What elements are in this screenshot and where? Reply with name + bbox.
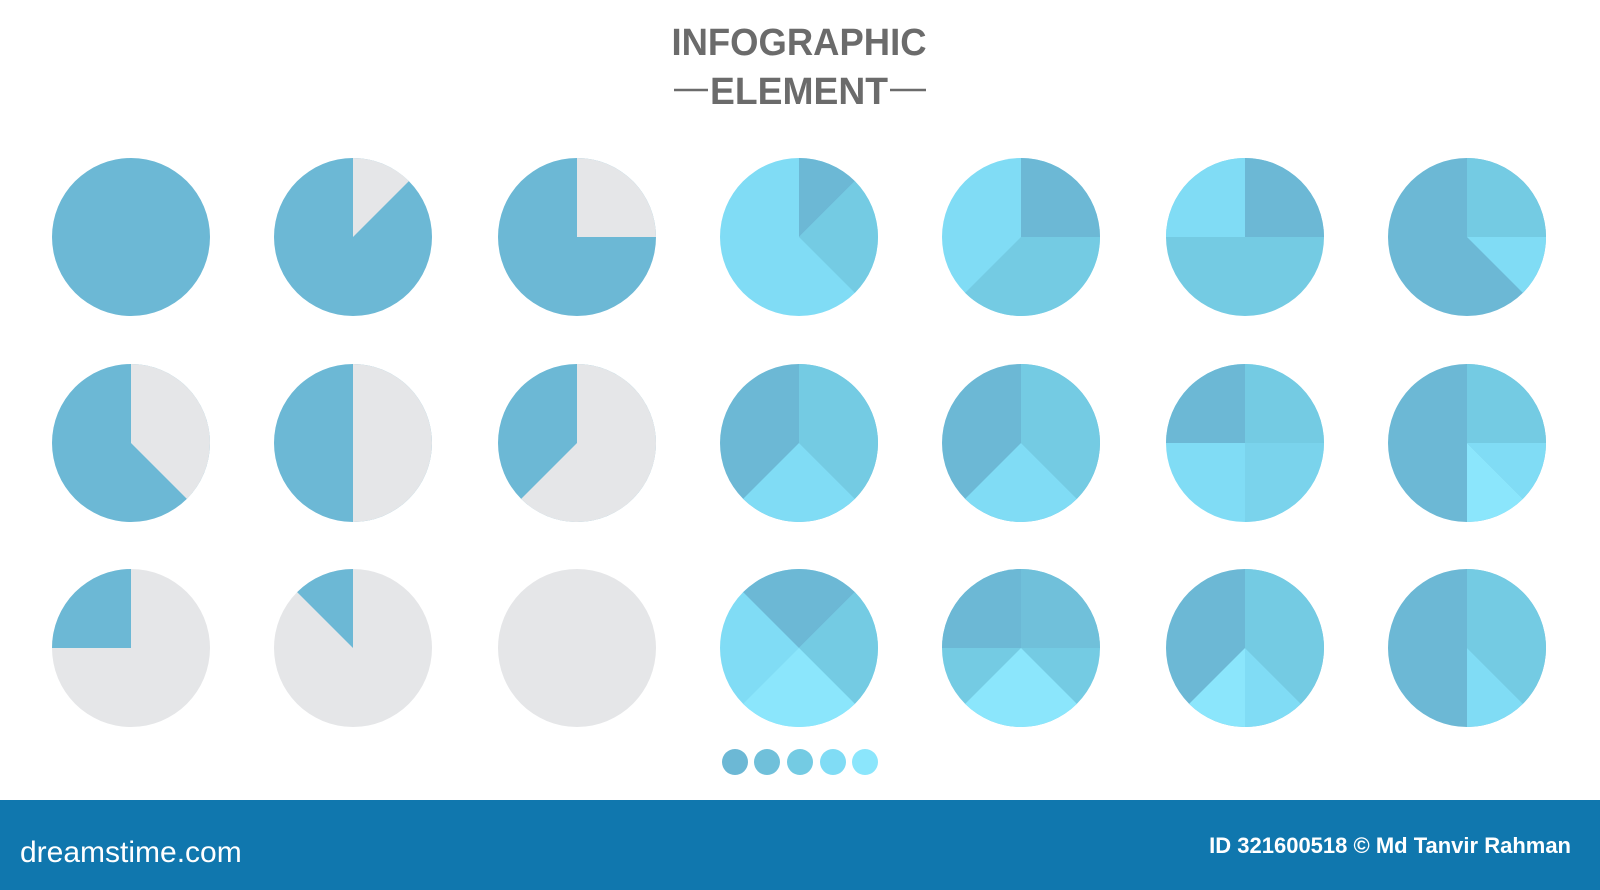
pie row 1 col 7 xyxy=(1388,158,1546,316)
pie row 1 col 6 xyxy=(1166,158,1324,316)
pie row 1 col 4 xyxy=(720,158,878,316)
pie row 3 col 1 xyxy=(52,569,210,727)
footer bar xyxy=(0,800,1600,890)
pie row 3 col 4 xyxy=(720,569,878,727)
pie row 2 col 3 xyxy=(498,364,656,522)
pagination dots xyxy=(722,749,878,775)
pie row 2 col 7 xyxy=(1388,364,1546,522)
title: INFOGRAPHIC xyxy=(672,22,926,64)
pie row 3 col 6 xyxy=(1166,569,1324,727)
pie row 3 col 7 xyxy=(1388,569,1546,727)
pie row 2 col 2 xyxy=(274,364,432,522)
pie row 1 col 3 xyxy=(498,158,656,316)
pie row 2 col 1 xyxy=(52,364,210,522)
pie row 1 col 2 xyxy=(274,158,432,316)
pie row 2 col 4 xyxy=(720,364,878,522)
footer credit: ID 321600518 © Md Tanvir Rahman xyxy=(1209,833,1571,858)
title: ELEMENT xyxy=(710,71,888,113)
pie row 1 col 1 xyxy=(52,158,210,316)
pie row 3 col 3 xyxy=(498,569,656,727)
pie row 1 col 5 xyxy=(942,158,1100,316)
pie row 3 col 5 xyxy=(942,569,1100,727)
footer logo text: dreamstime.com xyxy=(20,836,242,869)
pie row 3 col 2 xyxy=(274,569,432,727)
pie row 2 col 6 xyxy=(1166,364,1324,522)
title xyxy=(672,22,926,113)
pie row 2 col 5 xyxy=(942,364,1100,522)
